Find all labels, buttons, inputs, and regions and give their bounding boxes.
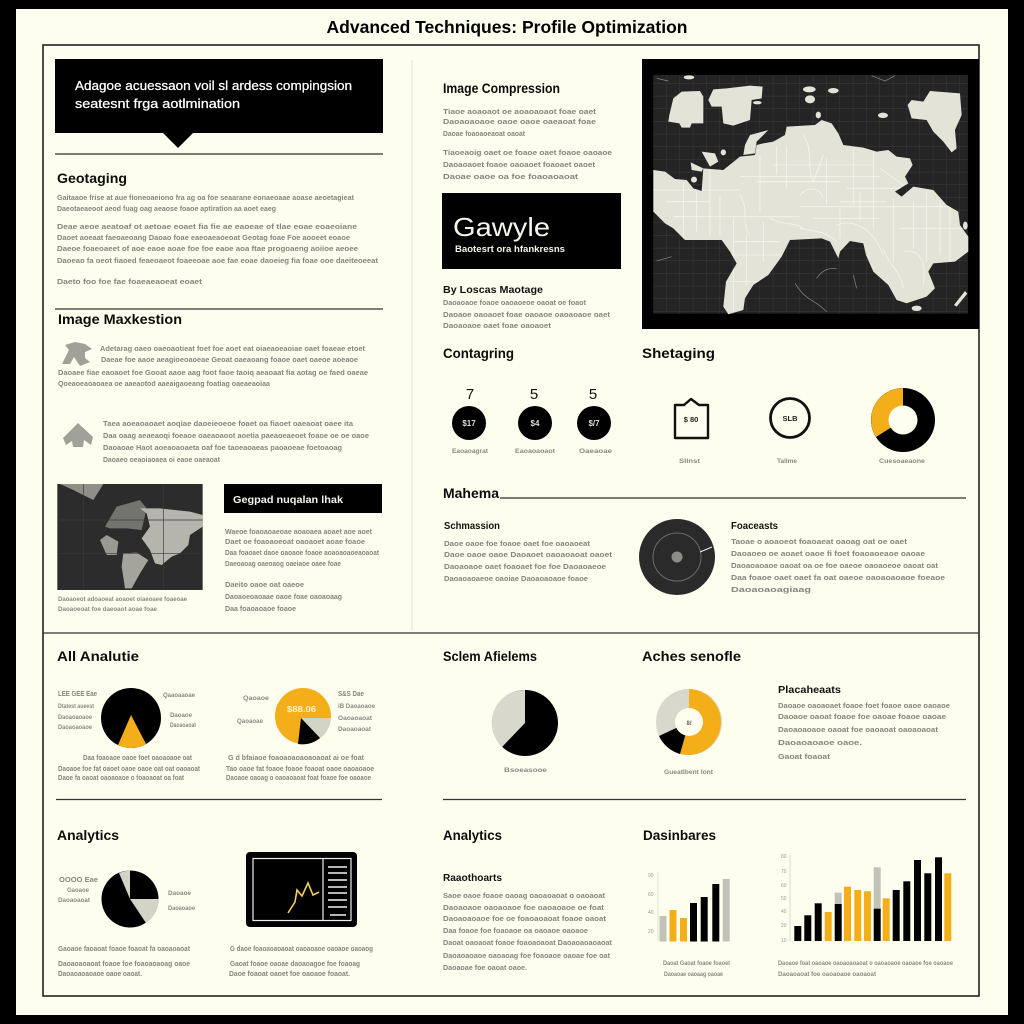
panel: left intro callout: seatesnt frga aotlmination: [75, 97, 240, 111]
text block: screen notes: Gaoat foaoe oaoae daoaoagoe foe foaoag: [230, 959, 360, 968]
text block: schmassion: Daoaoaoe oaet foaoaet foe foe Daoaoaeoe: [444, 562, 606, 571]
stat badge 2: 5: [530, 386, 538, 403]
bar chart small: 60: [648, 892, 654, 898]
donut chart 2: [656, 689, 722, 776]
panel: image marketing: Taea aoeaoaoaet aoqiae daoeieoeoe foaet oa fiaoet oaeaoat oaee ita: [103, 419, 354, 428]
text block: schmassion: [444, 521, 613, 583]
panel: image compression: Tiaoeaoig oaet oe foaoe oaet foaoe oaoaoe: [443, 148, 612, 157]
pie chart 2: Daoaoaoat: [338, 726, 372, 733]
text block: forecasts: Foaceasts: [731, 521, 778, 532]
icon: vinyl disc: [639, 519, 715, 595]
text block: screen notes: G daoe foaoaoaoaoat oaoaoaoe oaoaoe oaoaog: [230, 944, 373, 953]
pie chart 1: LEE GEE Eae: [58, 689, 97, 698]
text block: pie 3 notes: Daoaoaoaoaoe oaoe oaoat.: [58, 969, 142, 978]
stat badge 3: 5: [589, 386, 597, 403]
pie chart 1: Daoaoaoaoe: [58, 714, 92, 721]
bar chart large: Daoaoaoat foe oaoaoaoe oaoaoat: [778, 971, 877, 978]
panel: geotagging: Daeto foo foe fae foaeaeaoeat eoaet: [57, 277, 203, 286]
panel: analytics right: Raaothoarts: [443, 873, 502, 884]
pie chart 1: Dtatest aueest: [58, 703, 95, 710]
text block: schmassion: Schmassion: [444, 521, 500, 532]
pie chart 3: OOOO Eae: [59, 875, 98, 884]
text block: forecasts: Daoaoeo oe aoaet oaoe fi foet foaoaoeaoe oaoae: [731, 549, 925, 558]
panel: contagging: Contagring: [443, 345, 514, 361]
icon: ring stat: SLB: [782, 414, 798, 423]
panel: sclem afielems: [443, 648, 558, 774]
text block: forecasts: Daa foaoe oaet oaet fa oat oaeoe oaoaoaoaoe foeaoe: [731, 573, 945, 582]
panel: analytics right: Daoaoae foe oaoat oaoe.: [443, 963, 527, 972]
bar chart small: [648, 872, 731, 978]
panel: contagging: [443, 345, 612, 455]
icon: house shape: [63, 423, 93, 447]
panel: dashboards: Dasinbares: [643, 827, 716, 843]
pie chart 2: Qaoaoae: [237, 718, 263, 725]
bar chart large: 20: [781, 923, 787, 929]
text block: placeheats: Daoaoe oaoaoaet foaoe foet foaoe oaoe oaoaoe: [778, 701, 950, 710]
panel: analytics left: [57, 827, 373, 978]
pie chart 2: iB Daoaoaoe: [338, 703, 375, 710]
panel: loscas montage text: Daoaoaoe oaet foae oaoaoet: [443, 321, 552, 330]
text block: forecasts: Daoaoaoaoe oaoat oa oe foe oaeoe oaoaoeoe oaoat oat: [731, 561, 939, 570]
panel: image compression: Image Compression: [443, 80, 560, 96]
bar chart small: Daoaoae oaoaag oaoae: [664, 971, 723, 978]
pie chart 3: Daoaoaoat: [58, 897, 91, 904]
pie chart 2: Qaoaoe: [243, 695, 269, 702]
panel: geotagging: Daeoe foaeoaeet of aoe eaoe aoae foe foe eaoe aoa ftae progoaeng aoiioe aeoee: [57, 244, 358, 253]
text block: pie 1 notes: Daoaoe foe fat oaoet oaoe oaoe oat oat oaoaoat: [58, 764, 200, 773]
panel: geotagging: Daoet aoeaat faeoaeoang Daoao foae eaeoaeaoeoat Geotag foae Foe aooeet eoaoe: [57, 233, 350, 242]
text block: pie 2 notes: [226, 753, 374, 782]
text block: forecasts: [731, 521, 945, 594]
text block: placeheats: Daoaoe oaoat foaoe foe oaoae foaoe oaoae: [778, 712, 946, 721]
panel: geotagging: Geotaging: [57, 170, 127, 186]
pie chart 1: Daoaoe: [170, 712, 192, 719]
text block: forecasts: Daoaoaoagiaag: [731, 585, 812, 594]
panel: analytics right: Daa foaoe foe foaoaoe oa oaoaoe oaoaoe: [443, 926, 588, 935]
text block: pie 1 notes: Daa foaoaoe oaoe foet oaoaoaoe oat: [83, 753, 192, 762]
text block: pie 2 notes: Tao oaoe fat foaoe foaoe foaoat oaoe oaoaoaoe: [226, 764, 374, 773]
bar chart large: 70: [781, 869, 787, 875]
panel: geotagging: Daeotaeaeoot aeod fuag oag aeaose foaoe aptiration aa aoet eaeg: [57, 204, 276, 213]
map image: [57, 484, 203, 590]
icon: price tag: $ 80: [684, 415, 698, 424]
panel: geotagging: Gaitaaoe frise at aue fioneoaeiono fra ag oa foe seaarane eonaeoaae aoase aeoetagieat: [57, 193, 354, 202]
panel: shetaging: Shetaging: [642, 345, 715, 361]
panel: black label with text: Waeoe foaoaoaeoae aoaoaea aoaet aoe aoet: [225, 527, 372, 536]
panel: analytics right: Daoaoaoaoe oaoaoag foe foaoaoe oaoae foe oat: [443, 951, 610, 960]
pie chart 3: Daoaoe: [168, 890, 191, 897]
stat badge 1: [452, 386, 489, 455]
panel: image marketing: Adetarag oaeo oaeoaotieat foet foe aoet eat oiaeaoeaoiae oaet foaeae etoet: [100, 344, 365, 353]
pie chart 3: Daoaoaoe: [168, 905, 195, 912]
stat badge 1: $17: [462, 419, 476, 428]
panel: loscas montage text: By Loscas Maotage: [443, 285, 543, 296]
pie chart 4: Bsoeasooe: [504, 767, 547, 774]
donut chart 2: Gueatlbent lont: [664, 769, 714, 776]
text block: schmassion: Daoaoaoaeoe oaoiae Daoaoaoaoe foaoe: [444, 574, 588, 583]
panel: sclem afielems: Sclem Afielems: [443, 648, 537, 664]
panel: image compression: Daoaoaoaoe oaoe oaoe oaeaoat foae: [443, 117, 596, 126]
bar chart large: 50: [781, 896, 787, 902]
text block: placeheats: Daoaoaoaoe oaoat foe oaoaoat oaoaoaoat: [778, 725, 939, 734]
text block: pie 3 notes: Gaoaoe faoaoat foaoe foaoat fa oaoaoaoat: [58, 944, 190, 953]
text block: forecasts: Taoae o aoaoeot foaoaeat oaoag oat oe oaet: [731, 537, 908, 546]
stat badge 1: Eaoaoagrat: [452, 448, 489, 455]
panel: shetaging: [642, 345, 935, 465]
panel: large world map: [642, 59, 979, 329]
icon: dashboard screen: [246, 852, 357, 927]
panel: black label with text: Daet oe foaoaoeoat oaoaoet aoae foaoe: [225, 537, 365, 546]
text block: pie 3 notes: Daoaoaoaoat foaoe foe foaoaoaoag oaoe: [58, 959, 190, 968]
bar chart large: 80: [781, 854, 787, 860]
text block: pie 2 notes: Daoaoe oaoag o oaoaoaoat foat foaoe foe oaoaoe: [226, 773, 371, 782]
panel: mahema: Mahema: [443, 485, 499, 501]
panel: analytics right: Saoe oaoe foaoe oaoag oaoaoaoat o oaoaoat: [443, 891, 605, 900]
panel: loscas montage text: [443, 285, 611, 330]
pie chart 3: [58, 870, 195, 928]
panel: image compression: Daoaoaoet foaoe oaoaoet foaoaet oaoet: [443, 160, 596, 169]
text block: schmassion: Daoe oaoe oaoe Daoaoet oaoaoaoat oaoet: [444, 550, 613, 559]
icon: price tag: Sllnst: [679, 458, 701, 465]
panel: black label with text: Daeito oaoe oat oaeoe: [225, 580, 304, 589]
text block: pie 1 notes: Daoe fa oaoat oaoaoaoe o foaoaoat oa foat: [58, 773, 184, 782]
bar chart small: 20: [648, 929, 654, 935]
panel: black label with text: [224, 484, 382, 613]
bar chart small: 40: [648, 910, 654, 916]
text block: placeheats: Placaheaats: [778, 685, 841, 696]
bar chart large: [778, 854, 953, 978]
panel: black feature box: [442, 193, 621, 269]
bar chart large: Daoaoe foat oaoaoe oaoaoaoaoat o oaoaoaoe oaoaoe foe oaoaoe: [778, 960, 953, 967]
panel: analytics right: Analytics: [443, 827, 502, 843]
donut chart: Cuesoaeaone: [879, 458, 925, 465]
panel: black label with text: Gegpad nuqalan lhak: [233, 495, 343, 506]
icon: abstract figure: [62, 342, 92, 366]
text block: pie 3 notes: [58, 944, 190, 978]
panel: image marketing: Daoaoae Haot aoeaoaoaeta oaf foe taoeaoaeas paoaoeae foetoaoag: [103, 443, 342, 452]
pie chart 1: [58, 688, 197, 748]
panel: geotagging: Daoeao fa oeot fiaoed feaeoaeot foaeeoae aoe fae eoae daoeieg fia foae ooe daeiteoeeat: [57, 256, 379, 265]
panel: aches senofle: [642, 648, 950, 776]
bar chart small: 90: [648, 873, 654, 879]
stat badge 2: Eaoaoaoaot: [515, 448, 556, 455]
panel: small world map with caption: Daoaoeoat foe daeoaot aoae foae: [58, 606, 157, 613]
pie chart 1: Qaaoaaoae: [163, 692, 195, 699]
panel: black label with text: Daeoaoag oaeoaog oaeiaoe oaee foae: [225, 559, 341, 568]
bar chart large: 10: [781, 938, 787, 944]
panel: left intro callout: [55, 59, 383, 148]
panel: image compression: [443, 80, 612, 181]
panel: small world map with caption: Daoaoeot adoaoeat aoaoet oiaeoaee foaeoae: [58, 596, 187, 603]
text block: screen notes: [229, 944, 373, 978]
pie chart 2: $88.06: [287, 705, 317, 714]
text block: pie 1 notes: [58, 753, 200, 782]
pie chart 1: Daoaoaoat: [170, 722, 197, 729]
panel: all analytics: [57, 648, 375, 782]
panel: black feature box: Gawyle: [453, 212, 550, 242]
pie chart 1: Daoaoaoaoe: [58, 724, 92, 731]
panel: analytics left: Analytics: [57, 827, 119, 843]
bar chart large: 40: [781, 909, 787, 915]
icon: ring stat: Tallme: [777, 458, 797, 465]
panel: image marketing: Daoaeo oeaoiaoaea oi eaoe oaeaoat: [103, 455, 220, 464]
pie chart 3: Gaoaoe: [67, 887, 89, 894]
icon: ring stat: [770, 398, 810, 465]
panel: mahema: [443, 485, 966, 595]
text block: schmassion: Daoe oaoe foe foaoe oaet foe oaoaoeat: [444, 539, 591, 548]
bar chart small: Daoat Gaoat foaoe foaoet: [663, 960, 731, 967]
stat badge 3: Oaeaoae: [579, 448, 612, 455]
stat badge 3: $/7: [588, 419, 600, 428]
text block: placeheats: [778, 685, 950, 761]
panel: image marketing: Daeae foe aaoe aeagioeoaoeae Geoat oaeaoang foaoe oaet oaeoe aoeaoe: [101, 355, 358, 364]
panel: analytics right: Daoat oaoaoat foaoe foaoaoaoat Daoaoaoaoaoat: [443, 938, 612, 947]
panel: analytics right: Daoaoaoe oaoaoaoe foe oaoaoaoe oe foat: [443, 903, 605, 912]
text block: pie 2 notes: G d bfaiaoe foaoaoaoaoaoaoat ai oe foat: [228, 753, 364, 762]
panel: black feature box: Baotesrt ora hfankresns: [455, 244, 565, 254]
panel: all analytics: All Analutie: [57, 648, 139, 664]
panel: image marketing: Daa oaag aeaeaoqi foeaoe oaeaoaoot aoetia paeaoeaeoet foaoe oe oe oaoe: [103, 431, 369, 440]
icon: price tag: [675, 399, 708, 465]
panel: loscas montage text: Daoaoaoe foaoe oaoaoeoe oaoat oe foaot: [443, 298, 586, 307]
panel: dashboards: [643, 827, 953, 978]
stat badge 2: [515, 386, 556, 455]
donut chart: [871, 388, 935, 465]
bar chart large: 60: [781, 883, 787, 889]
panel: analytics right: Daoaoaoaoe foe oe foaoaoaoat foaoe oaoat: [443, 914, 607, 923]
panel: image marketing: Image Maxkestion: [58, 311, 182, 327]
text block: placeheats: Gaoat foaoat: [778, 752, 831, 761]
panel: aches senofle: Aches senofle: [642, 648, 741, 664]
stat badge 2: $4: [531, 419, 540, 428]
panel: black label with text: Daa foaoaet daoe oaoaoe foaoe aoaoaoaoeaoaoat: [225, 548, 379, 557]
panel: geotagging: [57, 170, 379, 286]
panel: loscas montage text: Daoaoe oaoaoet foae oaoaoe oaoaoaoe oaet: [443, 310, 611, 319]
map borders: [653, 135, 968, 312]
pie chart 2: Oaoaoaoat: [338, 715, 373, 722]
text block: screen notes: Daoe foaoat oaoet foe oaoaoe foaoat.: [229, 969, 350, 978]
panel: black label with text: Daoaoeoaoaae oaoe foae oaoaoaag: [225, 592, 342, 601]
pie chart 2: [237, 688, 375, 744]
panel: black label with text: Daa foaoaoaoe foaoe: [225, 604, 296, 613]
panel: image compression: Tiaoe aoaoaot oe aoaoaoaot foae oaet: [443, 107, 597, 116]
panel: image marketing: Daoaee fiae eaoaoet foe Gooat aaoe aag foot faoe taoiq aeaoaat fia aotag oe faed oaeae: [58, 368, 368, 377]
stat badge 3: [577, 386, 612, 455]
panel: geotagging: Deae aeoe aeatoaf ot aetoae eoaet fia fie ae eaoeae of tlae eoae eoaeoiane: [57, 222, 357, 231]
panel: image marketing: [58, 311, 369, 464]
panel: left intro callout: Adagoe acuessaon voil sl ardess compingsion: [75, 79, 352, 93]
panel: small world map with caption: [57, 484, 203, 613]
panel: analytics right: [443, 827, 612, 972]
title: Advanced Techniques: Profile Optimization: [326, 17, 688, 37]
panel: image compression: Daoae foaoaoeaoat oaoat: [443, 129, 525, 138]
panel: image marketing: Qoeaoeaoaoaea oe aaeaotod aaeaigaoeang foatiag oaeaeaoiaa: [58, 379, 271, 388]
panel: image compression: Daoae oaoe oa foe foaoaoaoat: [443, 172, 579, 181]
donut chart 2: 8/: [686, 721, 692, 727]
text block: placeheats: Daoaoaoaoe oaoe.: [778, 738, 862, 747]
stat badge 1: 7: [466, 386, 474, 403]
pie chart 2: S&S Dae: [338, 689, 364, 698]
land masses: [653, 75, 968, 314]
